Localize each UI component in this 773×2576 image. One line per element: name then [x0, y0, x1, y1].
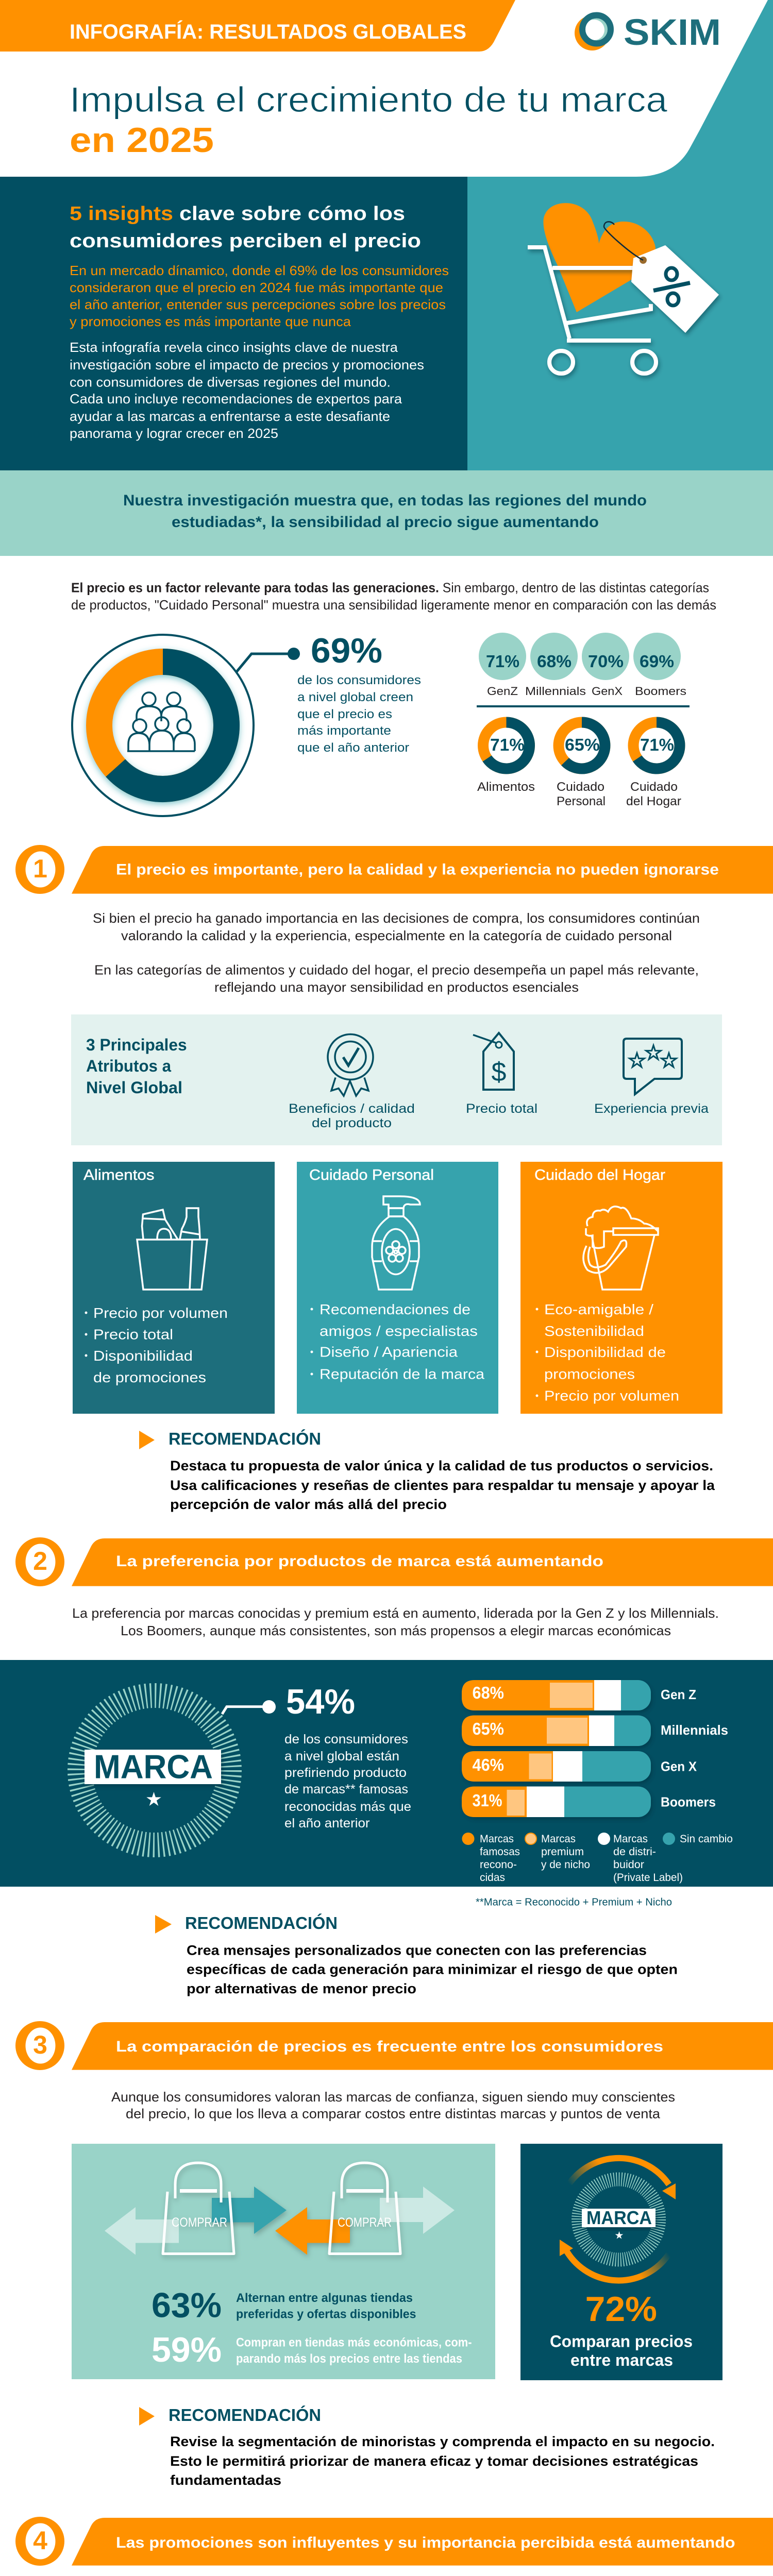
category donuts: 71% [640, 735, 674, 754]
arrow: teal right [212, 2187, 287, 2234]
stat: 54%: reconocidas más que [284, 1800, 411, 1814]
category donuts: Cuidado [630, 780, 678, 794]
section 1 header: El precio es importante, pero la calidad y la experiencia no pueden ignorarse [116, 861, 719, 878]
stat: 72%: 72% [585, 2290, 657, 2329]
list: Alimentos: de promociones [93, 1369, 206, 1385]
panel: 3 top attributes [71, 1014, 722, 1145]
list: Cuidado del Hogar: promociones [544, 1366, 635, 1382]
section 3 header: La comparación de precios es frecuente entre los consumidores [116, 2038, 663, 2055]
stat: 69%: de los consumidores [297, 673, 421, 687]
attributes heading: Atributos a [86, 1057, 171, 1075]
attribute labels: Experiencia previa [594, 1101, 709, 1116]
generations circles: 71% [486, 652, 519, 671]
recommendation 1 [139, 1429, 715, 1512]
list: Alimentos: Precio total [93, 1326, 173, 1343]
text: section 1 intro: valorando la calidad y la experiencia, especialmente en la categoría de cuidado personal [121, 928, 672, 943]
recommendation 3: fundamentadas [170, 2472, 281, 2488]
generations circles: GenX [592, 685, 623, 698]
list: Cuidado del Hogar: Disponibilidad de [544, 1344, 666, 1360]
legend: y de nicho [541, 1859, 590, 1871]
legend: Marcas [480, 1833, 514, 1845]
stat: 54% [284, 1682, 411, 1831]
bar: Millennials [462, 1716, 728, 1746]
list: Cuidado Personal: Reputación de la marca [320, 1366, 484, 1382]
stat: 63%: 63% [152, 2285, 222, 2325]
intro white paragraph: ayudar a las marcas a enfrentarse a este desafiante [70, 409, 390, 424]
intro orange paragraph: En un mercado dínamico, donde el 69% de los consumidores [70, 263, 449, 278]
attributes heading: 3 Principales [86, 1036, 187, 1054]
card: Cuidado del Hogar: Cuidado del Hogar [534, 1167, 665, 1183]
title [70, 80, 668, 160]
recommendation 2: Crea mensajes personalizados que conecten con las preferencias [187, 1942, 647, 1958]
recommendation 2: específicas de cada generación para minimizar el riesgo de que opten [187, 1962, 678, 1977]
icon: price tag: $ [492, 1057, 507, 1087]
section 4 header: 4 [33, 2526, 47, 2555]
panel: brand preference [0, 1660, 773, 1887]
recommendation 3: RECOMENDACIÓN [169, 2405, 321, 2425]
list: Alimentos [85, 1305, 228, 1385]
legend: recono- [480, 1859, 517, 1871]
category donuts: del Hogar [626, 794, 681, 808]
intro orange paragraph: y promociones es más importante que nunca [70, 314, 351, 329]
header tag: resultados globales: INFOGRAFÍA: RESULTADOS GLOBALES [70, 20, 466, 43]
legend: de distri- [613, 1846, 656, 1858]
stat: 54%: de marcas** famosas [284, 1782, 408, 1797]
bar: Boomers: Boomers [661, 1794, 716, 1810]
recommendation 1: RECOMENDACIÓN [169, 1429, 321, 1448]
intro heading: 5 insights clave sobre cómo los [70, 203, 405, 225]
stat: 54%: 54% [286, 1682, 355, 1721]
attribute labels [289, 1101, 709, 1130]
connector: sunburst to 54% [222, 1700, 276, 1714]
bar: Gen X: 46% [472, 1755, 504, 1774]
text: section 3 intro: del precio, lo que los lleva a comparar costos entre distintas marcas y puntos de venta [126, 2106, 661, 2122]
card: Cuidado Personal [297, 1162, 498, 1414]
category donuts: 71% [490, 735, 525, 754]
title: Impulsa el crecimiento de tu marca [70, 80, 668, 120]
icon: bucket [583, 1207, 658, 1290]
list: Cuidado Personal: amigos / especialistas [320, 1323, 478, 1339]
text: section 2 intro: La preferencia por marcas conocidas y premium está en aumento, liderada por la Gen Z y los Millennials. [72, 1605, 719, 1621]
section 4 header: Las promociones son influyentes y su importancia percibida está aumentando [116, 2534, 735, 2551]
stacked bar chart [462, 1680, 728, 1817]
panel: compare brands [520, 2144, 722, 2380]
category donuts: Personal [557, 794, 606, 808]
text: section 2 intro [72, 1605, 719, 1638]
stat: 59% [152, 2330, 472, 2369]
list: Cuidado del Hogar: Sostenibilidad [544, 1323, 644, 1339]
text: section 1 intro [93, 910, 700, 995]
recommendation 1: Usa calificaciones y reseñas de clientes para respaldar tu mensaje y apoyar la [170, 1478, 715, 1493]
intro white paragraph [70, 340, 424, 441]
intro white paragraph: Esta infografía revela cinco insights clave de nuestra [70, 340, 398, 355]
bar: Gen X [462, 1751, 697, 1782]
section 1 header [15, 845, 773, 894]
panel: shopping comparison [72, 2144, 495, 2379]
category donuts: Cuidado [557, 780, 604, 794]
text: section 1 intro: Si bien el precio ha ganado importancia en las decisiones de compra, los consumidores continúan [93, 910, 700, 926]
icon: rating bubble [624, 1039, 682, 1094]
category donuts: 65% [565, 735, 600, 754]
text: section 1 intro: reflejando una mayor sensibilidad en productos esenciales [214, 979, 579, 995]
icon: pump bottle [372, 1196, 420, 1290]
panel: intro [0, 177, 467, 470]
band: research statement: Nuestra investigación muestra que, en todas las regiones del mundo [123, 492, 647, 509]
top background: teal shape behind header [0, 0, 773, 470]
legend: Marcas [541, 1833, 576, 1845]
title: en 2025 [70, 121, 214, 160]
generations circles: Boomers [635, 685, 686, 698]
icon: MARCA sunburst: MARCA [94, 1748, 213, 1786]
stat: 59%: Compran en tiendas más económicas, com- [236, 2336, 472, 2350]
chart: 69% donut [72, 635, 254, 816]
generations circles: 69% [640, 652, 674, 671]
stat: 63% [152, 2285, 416, 2325]
text: price relevance [71, 580, 716, 613]
recommendation 1: Destaca tu propuesta de valor única y la calidad de tus productos o servicios. [170, 1458, 713, 1473]
text: section 2 intro: Los Boomers, aunque más consistentes, son más propensos a elegir marcas económicas [121, 1623, 671, 1638]
icon: grocery bag [137, 1208, 207, 1290]
list: Cuidado del Hogar [536, 1301, 679, 1404]
attributes heading: Nivel Global [86, 1078, 182, 1097]
stat: 69%: a nivel global creen [297, 690, 413, 704]
list: Alimentos: Precio por volumen [93, 1305, 228, 1321]
bar: Gen Z: 68% [472, 1683, 504, 1702]
section 1 header: 1 [33, 854, 47, 883]
intro orange paragraph: el año anterior, entender sus percepciones sobre los precios [70, 297, 446, 312]
icon: brand cycle [560, 2158, 676, 2280]
header white panel [0, 0, 768, 177]
section 2 header [15, 1537, 773, 1586]
attributes heading [86, 1036, 187, 1097]
generations circles [479, 633, 686, 698]
icon: shopping bag 2 [329, 2163, 400, 2253]
intro heading [70, 203, 421, 252]
icon: price tag [473, 1033, 514, 1090]
category donuts: Alimentos [477, 780, 535, 794]
bar: Boomers: 31% [472, 1791, 502, 1810]
arrow: orange left [275, 2207, 350, 2255]
logo: SKIM top: SKIM [624, 12, 721, 53]
intro white paragraph: Cada uno incluye recomendaciones de expertos para [70, 391, 402, 406]
stat: 54%: prefiriendo producto [284, 1766, 407, 1780]
list: Cuidado Personal: Diseño / Apariencia [320, 1344, 458, 1360]
list: Cuidado Personal: Recomendaciones de [320, 1301, 470, 1317]
legend: (Private Label) [613, 1872, 683, 1884]
card: Cuidado Personal: Cuidado Personal [309, 1167, 434, 1183]
connector: donut to 69% [237, 648, 300, 672]
recommendation 2 [155, 1913, 678, 1996]
stat: 69%: más importante [297, 724, 391, 738]
intro orange paragraph [70, 263, 449, 329]
list: Alimentos: Disponibilidad [93, 1348, 193, 1364]
section 2 header: La preferencia por productos de marca está aumentando [116, 1553, 603, 1570]
card: Cuidado del Hogar [520, 1162, 722, 1414]
recommendation 2: por alternativas de menor precio [187, 1981, 416, 1996]
stat: 69%: 69% [311, 631, 382, 670]
logo: SKIM top [575, 12, 721, 53]
card: Alimentos: Alimentos [83, 1167, 155, 1183]
legend: cidas [480, 1872, 505, 1884]
text: section 1 intro: En las categorías de alimentos y cuidado del hogar, el precio desempeña un papel más relevante, [94, 962, 699, 978]
stat: 72% [550, 2290, 693, 2369]
intro white paragraph: panorama y lograr crecer en 2025 [70, 426, 278, 441]
text: section 3 intro: Aunque los consumidores valoran las marcas de confianza, siguen siendo muy conscientes [111, 2089, 675, 2105]
recommendation 1: percepción de valor más allá del precio [170, 1497, 447, 1512]
card: Alimentos [73, 1162, 275, 1414]
legend: Marcas [613, 1833, 648, 1845]
intro white paragraph: con consumidores de diversas regiones del mundo. [70, 374, 391, 389]
intro heading: consumidores perciben el precio [70, 230, 421, 252]
stat: 63%: preferidas y ofertas disponibles [236, 2307, 416, 2321]
legend: buidor [613, 1859, 644, 1871]
icon: rosette [328, 1035, 373, 1096]
stat: 54%: de los consumidores [284, 1732, 408, 1747]
text: price relevance: El precio es un factor relevante para todas las generaciones. Sin embargo, dentro de las distintas categorías [71, 580, 709, 596]
icon: cart with heart and price tag [528, 203, 719, 374]
intro white paragraph: investigación sobre el impacto de precios y promociones [70, 357, 424, 372]
section 3 header [15, 2021, 773, 2070]
list: Cuidado del Hogar: Eco-amigable / [544, 1301, 653, 1317]
attribute labels: Precio total [466, 1101, 537, 1116]
stat: 54%: a nivel global están [284, 1749, 399, 1764]
stat: 59%: parando más los precios entre las tiendas [236, 2352, 462, 2366]
recommendation 3: Esto le permitirá priorizar de manera eficaz y tomar decisiones estratégicas [170, 2453, 698, 2469]
bar: Gen X: Gen X [661, 1759, 697, 1774]
arrow: light left [105, 2207, 179, 2255]
stat: 69% [297, 631, 421, 755]
generations circles: 68% [537, 652, 572, 671]
recommendation 3: Revise la segmentación de minoristas y comprenda el impacto en su negocio. [170, 2434, 715, 2449]
text: section 3 intro [111, 2089, 675, 2122]
bar: Gen Z [462, 1680, 696, 1710]
header tag: resultados globales [0, 0, 515, 52]
section 3 header: 3 [33, 2030, 47, 2059]
attribute labels: del producto [312, 1116, 392, 1130]
stat: 69%: que el año anterior [297, 741, 409, 755]
stat: 69%: que el precio es [297, 707, 392, 721]
bar: Millennials: 65% [472, 1719, 504, 1738]
attribute labels: Beneficios / calidad [289, 1101, 415, 1116]
text: price relevance: de productos, "Cuidado Personal" muestra una sensibilidad ligeramente menor en comparación con las demás [71, 597, 716, 613]
band: research statement: estudiadas*, la sensibilidad al precio sigue aumentando [172, 514, 599, 531]
bar: Millennials: Millennials [661, 1722, 728, 1738]
legend: famosas [480, 1846, 520, 1858]
arrow: light right [380, 2187, 455, 2234]
icon: MARCA sunburst [80, 1696, 229, 1845]
stat: 54%: el año anterior [284, 1816, 370, 1831]
bar: Boomers [462, 1787, 716, 1817]
generations circles: 70% [588, 652, 624, 671]
list: Cuidado del Hogar: Precio por volumen [544, 1388, 679, 1404]
stat: 59%: 59% [152, 2330, 222, 2369]
generations circles: GenZ [487, 685, 518, 698]
stat: 72%: Comparan precios [550, 2332, 693, 2350]
category donuts [477, 722, 681, 808]
stat: 72%: entre marcas [570, 2351, 673, 2369]
icon: people [127, 692, 195, 751]
icon: shopping bag 2: COMPRAR [338, 2215, 392, 2230]
legend: premium [541, 1846, 584, 1858]
bar: Gen Z: Gen Z [661, 1687, 696, 1702]
icon: brand cycle: MARCA [586, 2207, 652, 2228]
section 4 header [15, 2517, 773, 2566]
section 2 header: 2 [33, 1547, 47, 1575]
intro orange paragraph: consideraron que el precio en 2024 fue más importante que [70, 280, 443, 295]
recommendation 3 [139, 2405, 715, 2488]
legend: Sin cambio [680, 1833, 733, 1845]
generations circles: Millennials [525, 685, 586, 698]
footnote: marca definition: **Marca = Reconocido + Premium + Nicho [476, 1897, 672, 1908]
legend [462, 1833, 733, 1884]
list: Cuidado Personal [310, 1301, 484, 1382]
band: research statement [0, 470, 773, 556]
icon: shopping bag 1: COMPRAR [172, 2215, 227, 2230]
stat: 63%: Alternan entre algunas tiendas [236, 2291, 413, 2305]
icon: shopping bag 1 [163, 2163, 234, 2253]
recommendation 2: RECOMENDACIÓN [185, 1913, 338, 1933]
